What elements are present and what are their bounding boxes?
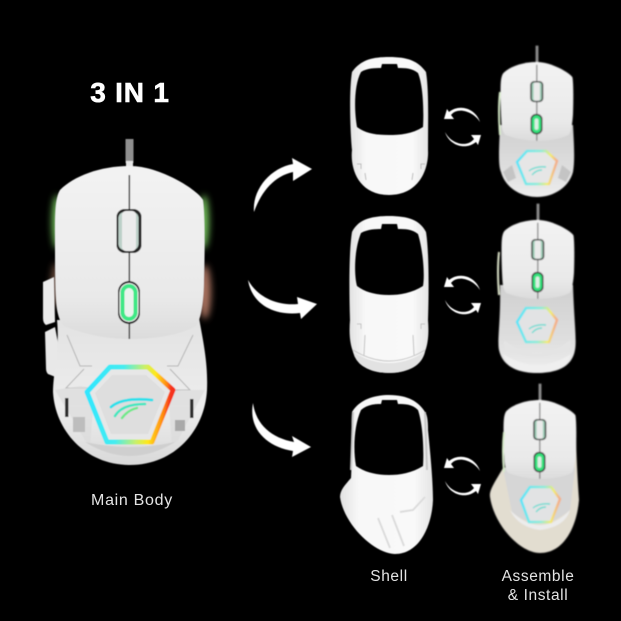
shell one bbox=[350, 57, 428, 195]
translucent lower body bbox=[499, 125, 574, 197]
arrow: to shell two bbox=[248, 280, 317, 319]
oval button bbox=[118, 281, 140, 324]
hexagon rgb badge bbox=[87, 367, 173, 442]
mouse top bbox=[504, 384, 576, 479]
logo bbox=[111, 399, 152, 418]
logo bbox=[533, 504, 550, 512]
cable bbox=[126, 139, 134, 169]
assembled mouse two bbox=[498, 204, 576, 373]
shell three bbox=[340, 395, 433, 554]
shell two bbox=[349, 216, 429, 373]
arrow: to shell three bbox=[252, 403, 311, 457]
hexagon bbox=[521, 487, 560, 522]
translucent skirt bbox=[490, 440, 579, 553]
scroll wheel bbox=[116, 209, 142, 253]
title: 3 IN 1 bbox=[90, 77, 170, 108]
main body mouse bbox=[43, 139, 211, 465]
side glow lights bbox=[51, 195, 211, 319]
logo bbox=[529, 167, 546, 175]
label: assemble and install: & Install bbox=[508, 587, 568, 604]
translucent lower body bbox=[498, 285, 576, 373]
lower body bbox=[53, 318, 207, 465]
top shell bbox=[55, 166, 205, 339]
side lights bbox=[499, 92, 500, 135]
assembled mouse three bbox=[490, 384, 579, 553]
label: shell: Shell bbox=[370, 568, 408, 585]
arrow: to shell one bbox=[254, 158, 312, 212]
cycle icon three bbox=[444, 457, 481, 495]
cycle icon two bbox=[444, 276, 481, 314]
hexagon bbox=[517, 151, 557, 184]
mouse top bbox=[502, 204, 574, 299]
assembled mouse one bbox=[499, 46, 574, 197]
cycle icon one bbox=[444, 108, 481, 146]
side buttons bbox=[43, 277, 63, 378]
hexagon bbox=[517, 308, 557, 342]
side lights bbox=[498, 252, 499, 295]
lower panel lines and vents bbox=[55, 335, 205, 456]
centre seam bbox=[128, 175, 130, 339]
mouse top bbox=[501, 46, 573, 141]
label: main body: Main Body bbox=[91, 492, 173, 509]
label: assemble and install: Assemble bbox=[502, 568, 574, 585]
side lights bbox=[503, 432, 504, 472]
logo bbox=[529, 325, 546, 333]
